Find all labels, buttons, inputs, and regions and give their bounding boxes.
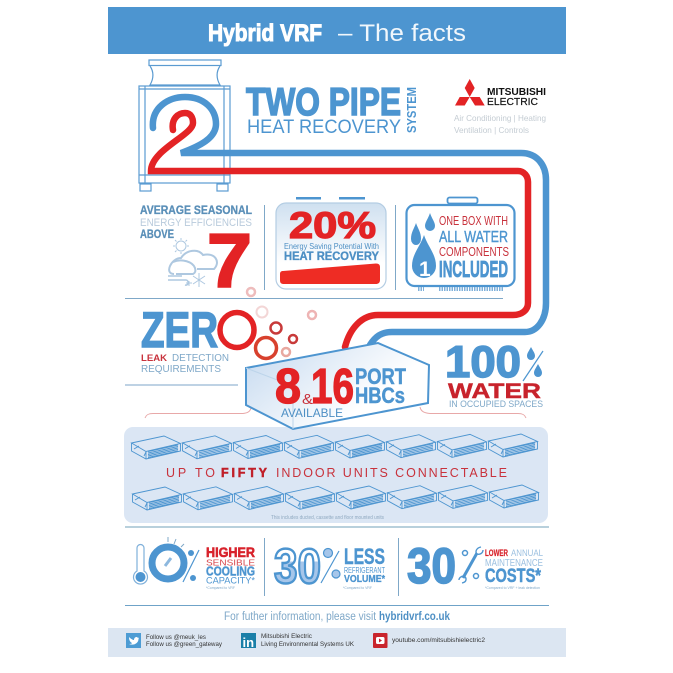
seasonal efficiency block: ENERGY EFFICIENCIES	[140, 217, 252, 229]
mitsubishi electric logo: Ventilation | Controls	[454, 125, 529, 135]
footer band	[108, 628, 566, 657]
panel: one box: INCLUDED	[439, 256, 508, 282]
zero leak block: ZER	[141, 302, 218, 358]
footnote: This includes ducted, cassette and floor mounted units	[271, 515, 384, 521]
zero leak block	[141, 302, 254, 375]
stat: lower maintenance	[407, 538, 543, 594]
heading: two pipe: HEAT RECOVERY	[247, 116, 401, 138]
header banner: – The facts	[338, 20, 466, 47]
zero leak block: LEAK	[141, 353, 167, 364]
twitter handles: Follow us @meuk_les	[146, 635, 206, 641]
further information line: For futher information, please visit	[224, 611, 377, 623]
mitsubishi electric logo: Air Conditioning | Heating	[454, 113, 546, 123]
outdoor unit icon	[139, 60, 230, 191]
header banner	[108, 7, 566, 54]
100% water block: 100	[445, 338, 521, 387]
stat: lower maintenance: MAINTENANCE	[485, 558, 543, 569]
panel: one box: ALL WATER	[439, 229, 508, 246]
duct units top row	[132, 434, 538, 459]
red pipe	[151, 113, 528, 347]
icon: linkedin	[241, 633, 256, 650]
youtube url: youtube.com/mitsubishielectric2	[392, 638, 486, 644]
twitter handles	[146, 635, 222, 648]
mitsubishi electric logo: MITSUBISHI	[487, 86, 546, 98]
HBC box: &	[302, 391, 313, 408]
stat: less refrigerant: VOLUME*	[344, 573, 386, 585]
capacity text: INDOOR UNITS CONNECTABLE	[276, 466, 507, 480]
stat: higher cooling: COOLING	[206, 564, 255, 578]
duct units bottom row	[132, 485, 538, 510]
stat: higher cooling	[134, 537, 256, 590]
stat: lower maintenance: LOWER	[485, 548, 508, 558]
divider	[264, 205, 396, 290]
linkedin name: Living Environmental Systems UK	[261, 642, 354, 648]
twitter handles: Follow us @green_gateway	[146, 642, 222, 648]
stat: higher cooling: HIGHER	[206, 544, 255, 560]
icon: twitter	[126, 633, 141, 648]
icon: wrench percent	[459, 547, 483, 583]
stat: lower maintenance: *Compared to VRF + leak detection	[485, 586, 540, 590]
further information line: hybridvrf.co.uk	[379, 611, 451, 623]
heading: two pipe: TWO PIPE	[246, 81, 401, 124]
100% water block: IN OCCUPIED SPACES	[449, 399, 543, 410]
linkedin name: Mitsubishi Electric	[261, 634, 312, 640]
panel: one box: COMPONENTS	[439, 244, 509, 259]
HBC box	[246, 343, 429, 429]
icon: weather	[168, 238, 217, 287]
bubbles	[247, 288, 316, 358]
linkedin name	[261, 634, 354, 648]
thin red connector lines	[145, 407, 526, 418]
panel: indoor units	[124, 427, 548, 523]
HBC box: 16	[311, 360, 354, 414]
capacity text: FIFTY	[221, 466, 268, 480]
100% water block	[445, 338, 543, 410]
icon: water drops: 1	[419, 258, 431, 281]
stat: higher cooling: SENSIBLE	[206, 558, 255, 568]
mitsubishi electric logo: ELECTRIC	[487, 96, 538, 108]
heading: two pipe: SYSTEM	[404, 87, 419, 133]
stat: less refrigerant: *Compared to VRF	[343, 586, 372, 590]
capacity text: UP TO	[166, 466, 215, 480]
HBC box: 8	[275, 360, 301, 414]
stat: lower maintenance: 30	[407, 538, 456, 594]
panel: 20 percent saving: 20%	[289, 205, 376, 246]
stat: lower maintenance: COSTS*	[485, 566, 541, 587]
zero leak block: DETECTION	[172, 353, 229, 364]
stat: less refrigerant: 30	[274, 540, 321, 594]
100% water block: WATER	[448, 380, 541, 403]
stat: less refrigerant: LESS	[344, 544, 385, 569]
stat: less refrigerant: REFRIGERANT	[344, 566, 385, 575]
panel: 20 percent saving	[276, 197, 386, 289]
seasonal efficiency block: AVERAGE SEASONAL	[140, 203, 252, 217]
seasonal efficiency block	[140, 203, 252, 304]
panel: one box	[406, 198, 514, 289]
icon: thermometer and dial	[134, 537, 199, 584]
stat: higher cooling: *Compared to VRF	[206, 586, 235, 590]
panel: 20 percent saving: Energy Saving Potential With	[284, 242, 379, 251]
seasonal efficiency block: 7	[207, 219, 252, 304]
stat: lower maintenance: ANNUAL	[511, 548, 543, 558]
panel: 20 percent saving: HEAT RECOVERY	[284, 251, 379, 263]
stat: less refrigerant	[274, 540, 386, 594]
stat: higher cooling: CAPACITY*	[206, 576, 256, 586]
HBC box: PORT	[355, 364, 406, 389]
seasonal efficiency block: ABOVE	[140, 227, 174, 241]
panel: one box: ONE BOX WITH	[439, 213, 508, 228]
HBC box: AVAILABLE	[281, 406, 343, 420]
blue pipe	[153, 97, 546, 345]
icon: youtube	[373, 633, 388, 648]
icon: linkedin: in	[242, 635, 254, 650]
HBC box: HBCs	[355, 383, 405, 408]
mitsubishi electric logo	[454, 79, 546, 135]
capacity text	[166, 466, 507, 480]
header banner: Hybrid VRF	[208, 20, 322, 47]
zero leak block: REQUIREMENTS	[141, 364, 221, 375]
